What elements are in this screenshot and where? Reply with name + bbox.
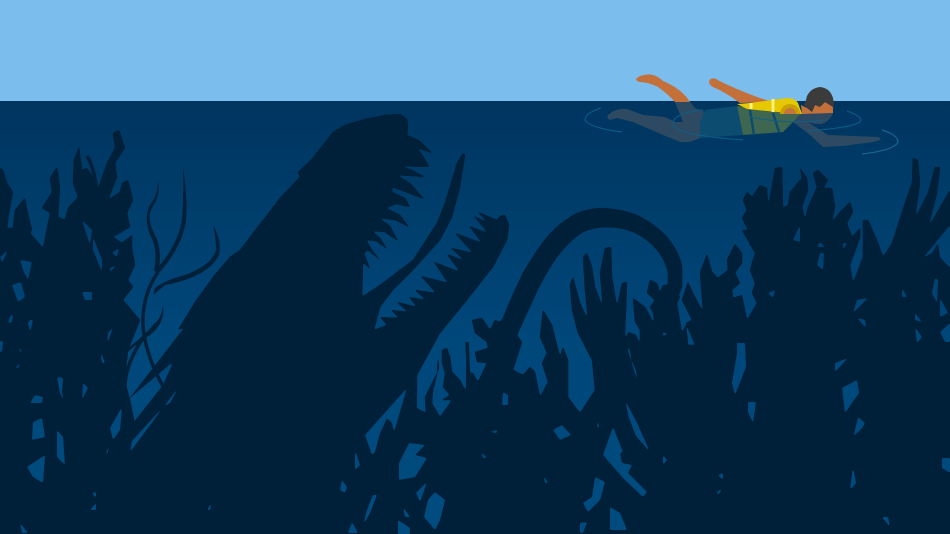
swimmer: raised arm	[709, 78, 772, 103]
ripple: centre	[673, 110, 743, 140]
swimmer: hair	[804, 87, 834, 112]
silhouette: monster and seaweed	[0, 114, 950, 534]
kelp: main stem	[87, 156, 469, 423]
ripple: far right	[862, 130, 898, 154]
swimmer: vest straps	[750, 110, 779, 135]
swimmer: neck	[784, 108, 796, 114]
kelp: lower branch	[128, 305, 163, 352]
ripple: left	[585, 108, 622, 132]
ripple: right	[808, 111, 861, 131]
water gaps showing through the silhouette	[0, 220, 950, 534]
kelp: wavy strand	[147, 180, 160, 275]
swimmer	[607, 74, 881, 147]
swimmer: raised back leg	[636, 74, 690, 102]
monster: head, open jaws and body	[125, 114, 509, 534]
swimmer: submerged arm and head	[793, 113, 881, 147]
ripple: across body	[750, 117, 823, 122]
swimmer: face	[801, 102, 833, 114]
swimmer: vest highlights	[751, 99, 773, 112]
swimmer: vest collar	[780, 104, 800, 114]
swimmer: submerged life vest	[737, 106, 802, 135]
seaweed: left cluster	[0, 130, 140, 534]
kelp strands	[87, 156, 469, 423]
sky	[0, 0, 950, 101]
seaweed: centre and right clusters with reaching hand	[416, 158, 950, 534]
water ripples	[585, 108, 898, 154]
kelp: side frond	[153, 225, 220, 295]
swimmer: shorts	[700, 106, 743, 138]
kelp: tall strand	[155, 167, 187, 272]
monster: long curved neck	[503, 208, 682, 335]
swimmer: submerged legs	[607, 102, 708, 142]
swimmer: life vest above water	[737, 98, 802, 114]
